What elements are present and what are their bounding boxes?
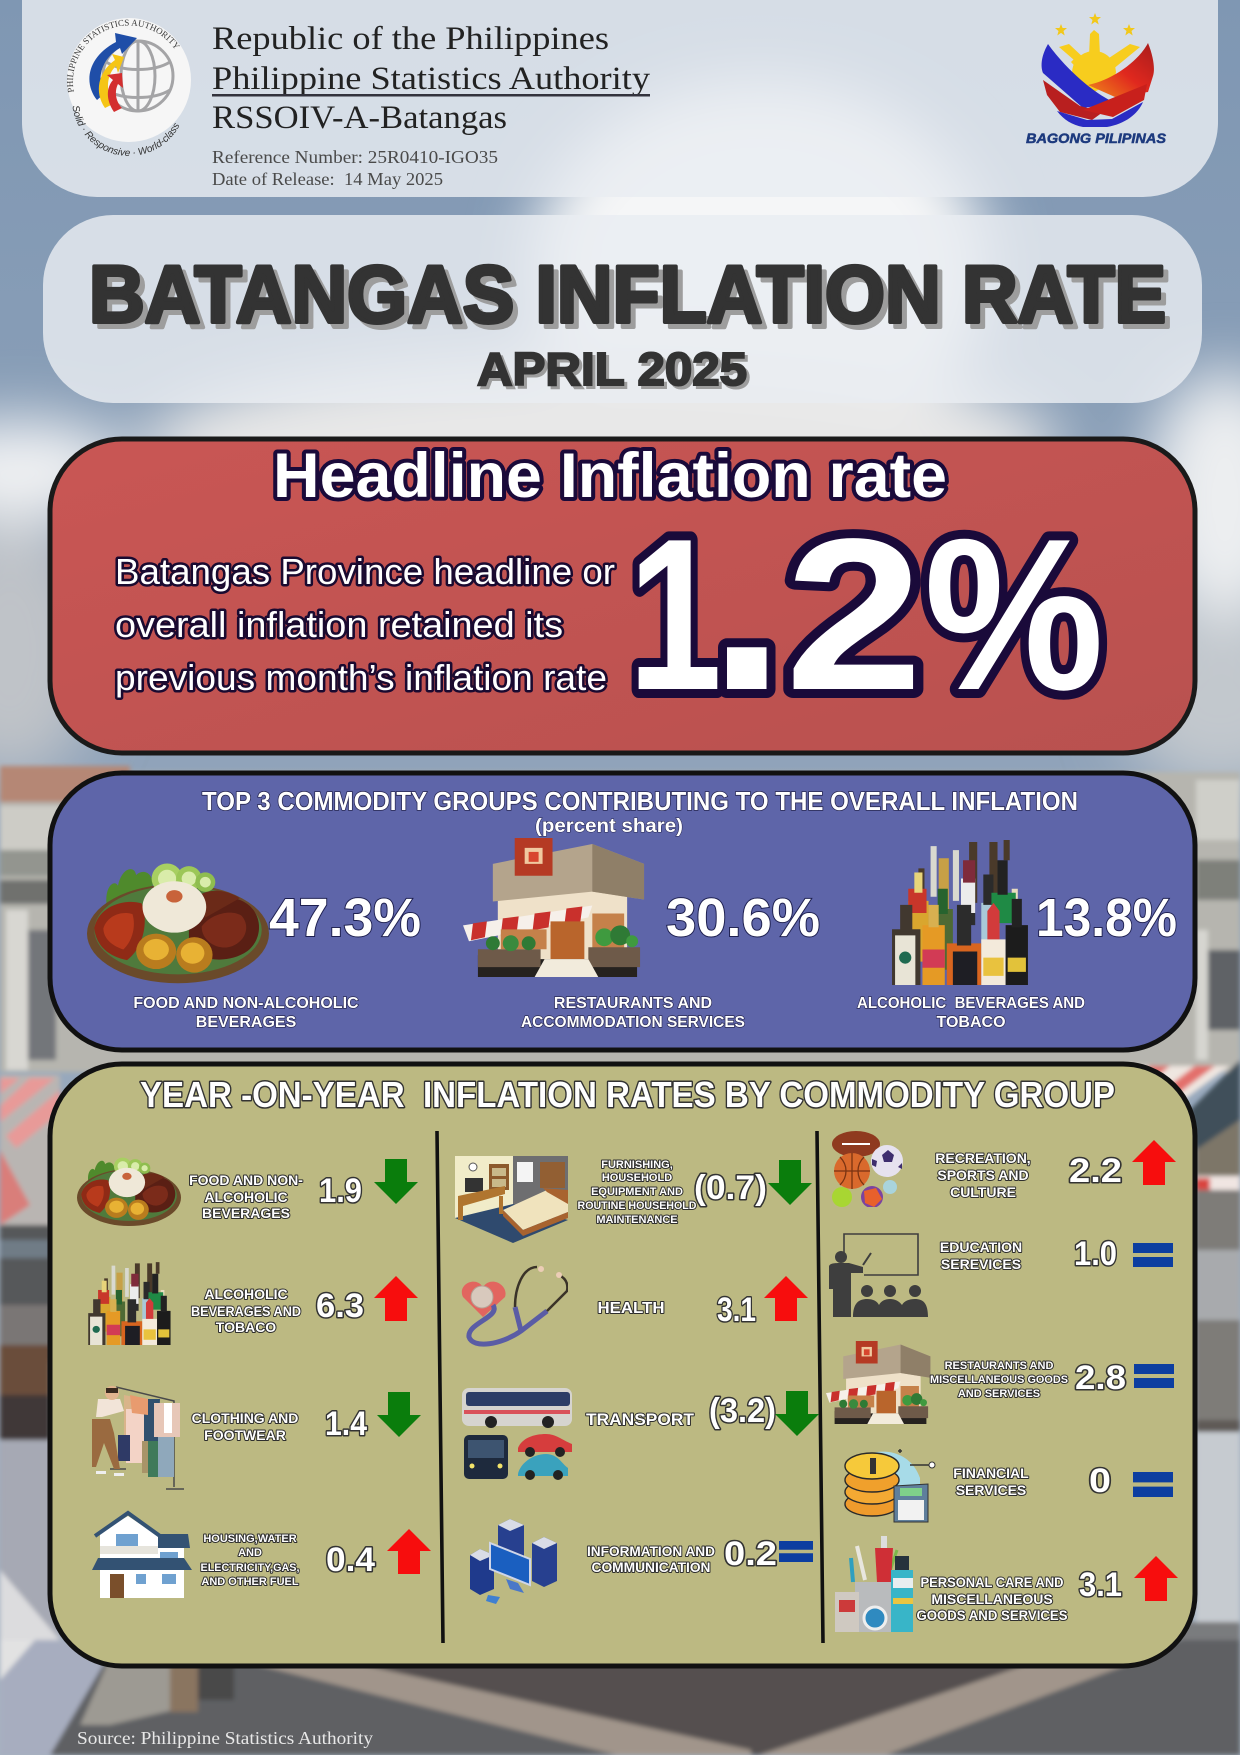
- row: food: ALCOHOLIC: [204, 1189, 288, 1205]
- subheading: April 2025: APRIL 2025: [477, 343, 747, 395]
- stalls right: [1120, 1066, 1230, 1110]
- big number: 1.2%: .: [708, 437, 786, 749]
- row: recreation: RECREATION,: [935, 1150, 1031, 1166]
- row: housing: ELECTRICITY,GAS,: [200, 1562, 300, 1574]
- heading: Batangas Inflation Rate: BATANGAS INFLATION RATE: [94, 255, 1171, 345]
- heading: Batangas Inflation Rate: BATANGAS INFLATION RATE: [89, 250, 1166, 340]
- organisation names: RSSOIV-A-Batangas: [212, 100, 507, 136]
- big number: 1.2%: %: [924, 493, 1104, 735]
- row: housing: [92, 1513, 431, 1598]
- pavement: [0, 1640, 1240, 1755]
- description text: Batangas Province headline or: [115, 551, 615, 592]
- item: restaurants and accommodation services: [463, 838, 820, 1031]
- icon: Bagong Pilipinas logo: [1026, 13, 1166, 146]
- row: personal care: 3.1: [1079, 1566, 1122, 1604]
- icon: Philippine Statistics Authority seal: [67, 18, 191, 156]
- row: transport: [462, 1388, 819, 1480]
- item: alcoholic beverages and tobaco: 13.8%: [1036, 888, 1177, 948]
- reference number and release date: [212, 147, 498, 189]
- row: recreation: SPORTS AND: [937, 1167, 1029, 1183]
- item: alcoholic beverages and tobaco: [857, 840, 1177, 1031]
- row: personal care: [835, 1536, 1178, 1632]
- big number: 1.2%: 1: [628, 493, 722, 735]
- heading: top 3 commodity groups: TOP 3 COMMODITY GROUPS CONTRIBUTING TO THE OVERALL INFLATION: [202, 786, 1078, 816]
- row: furnishing: MAINTENANCE: [596, 1214, 678, 1226]
- row: information and communication: 0.2: [724, 1535, 777, 1573]
- panel: headline inflation rate: [50, 437, 1195, 753]
- row: clothing: FOOTWEAR: [204, 1427, 286, 1443]
- row: personal care: MISCELLANEOUS: [931, 1591, 1053, 1607]
- item: food and non-alcoholic beverages: [87, 864, 421, 1031]
- item: food and non-alcoholic beverages: 47.3%: [269, 888, 421, 948]
- row: restaurants: AND SERVICES: [958, 1388, 1040, 1400]
- row: restaurants: RESTAURANTS AND: [945, 1360, 1053, 1372]
- row: recreation: [832, 1131, 1176, 1208]
- reference number and release date: Date of Release: 14 May 2025: [212, 169, 443, 189]
- heading: year-on-year inflation rates by commodity group: YEAR -ON-YEAR INFLATION RATES BY COMMODITY GROUP: [140, 1074, 1115, 1115]
- row: furnishing: [455, 1156, 812, 1243]
- row: clothing: [92, 1386, 421, 1489]
- description text: previous month’s inflation rate: [115, 657, 607, 698]
- organisation names: Philippine Statistics Authority: [212, 61, 651, 97]
- big number: 1.2%: 2: [785, 493, 923, 735]
- row: furnishing: EQUIPMENT AND: [591, 1186, 683, 1198]
- heading: top 3 commodity groups: (percent share): [535, 816, 683, 837]
- row: health: 3.1: [717, 1291, 756, 1329]
- item: food and non-alcoholic beverages: FOOD AND NON-ALCOHOLIC: [133, 995, 359, 1012]
- row: alcoholic beverages: [88, 1262, 418, 1345]
- row: restaurants: 2.8: [1075, 1359, 1126, 1397]
- row: alcoholic beverages: TOBACO: [216, 1319, 276, 1335]
- row: transport: TRANSPORT: [586, 1410, 695, 1429]
- item: alcoholic beverages and tobaco: ALCOHOLIC BEVERAGES AND: [857, 995, 1085, 1012]
- row: education: 1.0: [1074, 1235, 1117, 1273]
- row: housing: AND: [238, 1547, 262, 1559]
- row: information and communication: COMMUNICATION: [592, 1559, 710, 1575]
- row: information and communication: INFORMATION AND: [587, 1543, 715, 1559]
- row: personal care: GOODS AND SERVICES: [916, 1607, 1068, 1623]
- row: alcoholic beverages: 6.3: [316, 1287, 364, 1325]
- row: education: [829, 1234, 1173, 1317]
- row: furnishing: FURNISHING,: [601, 1159, 673, 1171]
- icon: Philippine Statistics Authority seal: Solid · Responsive · World-class: [72, 106, 179, 156]
- description text: [115, 551, 615, 698]
- panel: header: [22, 0, 1218, 197]
- row: food: BEVERAGES: [202, 1205, 290, 1221]
- item: restaurants and accommodation services: RESTAURANTS AND: [554, 995, 712, 1012]
- description text: overall inflation retained its: [115, 604, 563, 645]
- row: alcoholic beverages: ALCOHOLIC: [204, 1286, 288, 1302]
- row: alcoholic beverages: BEVERAGES AND: [191, 1303, 301, 1319]
- building: [0, 772, 1240, 1072]
- row: financial: [845, 1449, 1173, 1522]
- reference number and release date: Reference Number: 25R0410-IGO35: [212, 147, 498, 167]
- row: food: FOOD AND NON-: [189, 1172, 303, 1188]
- row: housing: AND OTHER FUEL: [201, 1576, 299, 1588]
- row: transport: (3.2): [709, 1392, 776, 1430]
- row: restaurants: [826, 1341, 1174, 1424]
- panel: year-on-year inflation rates: [50, 1064, 1195, 1666]
- row: recreation: CULTURE: [950, 1184, 1016, 1200]
- row: education: SEREVICES: [941, 1256, 1021, 1272]
- row: financial: SERVICES: [956, 1482, 1026, 1498]
- item: alcoholic beverages and tobaco: TOBACO: [936, 1014, 1006, 1031]
- heading: top 3 commodity groups: [202, 786, 1078, 837]
- panel: title: [43, 215, 1202, 403]
- row: housing: HOUSING,WATER: [203, 1533, 297, 1545]
- item: restaurants and accommodation services: 30.6%: [666, 888, 820, 948]
- row: clothing: 1.4: [325, 1405, 367, 1443]
- row: information and communication: [470, 1519, 813, 1604]
- row: clothing: CLOTHING AND: [192, 1410, 298, 1426]
- row: education: EDUCATION: [940, 1239, 1022, 1255]
- subheading: April 2025: APRIL 2025: [480, 346, 750, 398]
- row: food: [77, 1158, 418, 1226]
- row: food: 1.9: [319, 1172, 362, 1210]
- row: furnishing: HOUSEHOLD: [602, 1172, 672, 1184]
- row: financial: 0: [1089, 1462, 1111, 1500]
- item: restaurants and accommodation services: ACCOMMODATION SERVICES: [521, 1014, 745, 1031]
- row: health: [462, 1266, 808, 1344]
- row: furnishing: ROUTINE HOUSEHOLD: [578, 1200, 697, 1212]
- row: housing: 0.4: [326, 1541, 375, 1579]
- stalls left: [0, 1075, 60, 1225]
- row: restaurants: MISCELLANEOUS GOODS: [930, 1374, 1068, 1386]
- icon: Philippine Statistics Authority seal: PHILIPPINE STATISTICS AUTHORITY: [67, 20, 180, 93]
- panel: top 3 commodity groups: [50, 773, 1195, 1050]
- row: furnishing: (0.7): [694, 1169, 767, 1207]
- row: financial: FINANCIAL: [953, 1465, 1029, 1481]
- organisation names: [212, 21, 651, 136]
- item: food and non-alcoholic beverages: BEVERAGES: [196, 1014, 297, 1031]
- row: health: HEALTH: [598, 1300, 664, 1317]
- icon: Bagong Pilipinas logo: BAGONG PILIPINAS: [1026, 131, 1166, 146]
- heading: Headline Inflation rate: Headline Inflation rate: [273, 441, 947, 511]
- row: recreation: 2.2: [1069, 1152, 1122, 1190]
- source note: Source: Philippine Statistics Authority: [77, 1728, 373, 1748]
- organisation names: Republic of the Philippines: [212, 21, 609, 57]
- row: personal care: PERSONAL CARE AND: [920, 1574, 1064, 1590]
